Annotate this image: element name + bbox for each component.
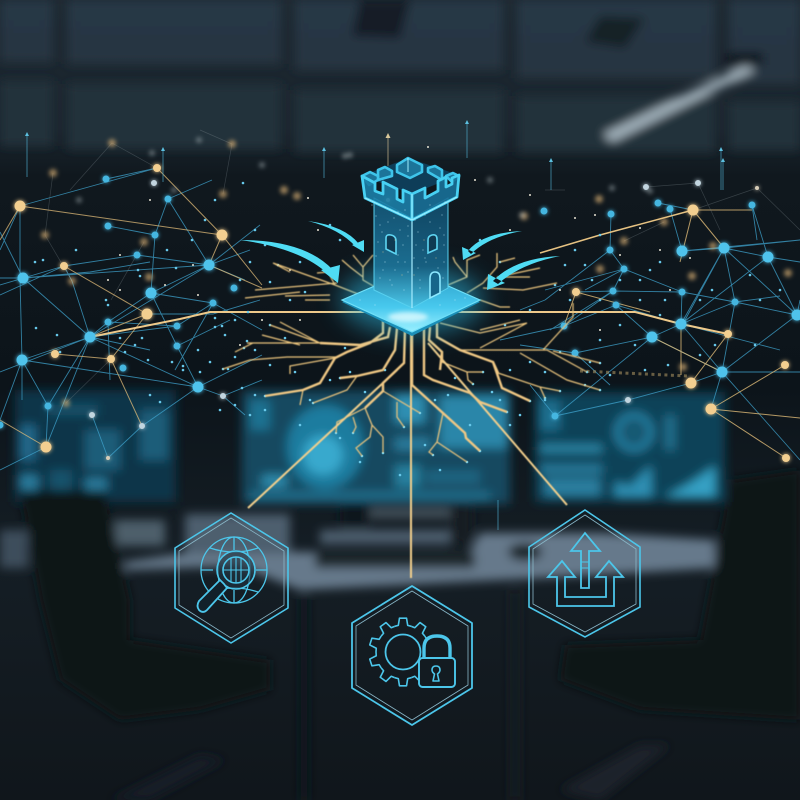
trunk roots (265, 320, 530, 451)
crown interior (362, 158, 459, 194)
tower glow (340, 266, 484, 334)
scattered data dots (35, 147, 780, 475)
arrow lower right (487, 256, 560, 290)
ceiling light (603, 66, 756, 142)
desk and keyboard (0, 502, 715, 590)
tower speckles (360, 202, 465, 305)
dotted trail (580, 371, 688, 376)
arrow upper right (462, 231, 522, 260)
long root lines (248, 330, 567, 578)
gold upper line (540, 210, 693, 253)
gold main line (90, 312, 415, 337)
network nodes (0, 168, 797, 458)
gold edges (564, 210, 800, 458)
faint dim edges (45, 130, 232, 403)
magnifier (198, 551, 255, 612)
gold edges (0, 168, 262, 447)
hex icon: upward arrows (529, 510, 640, 637)
cyan inbound arrows (240, 221, 560, 290)
golden roots (223, 253, 600, 578)
left network constellation (0, 130, 415, 470)
padlock (419, 636, 455, 687)
globe (201, 537, 267, 603)
lower cabinets and chairs (20, 470, 800, 800)
arrow upper left (308, 221, 364, 252)
blue edges (500, 203, 800, 460)
ceiling fixtures (352, 0, 763, 65)
faint dim edges (545, 183, 800, 241)
tower crown (362, 158, 459, 220)
tower on glowing platform (340, 158, 484, 336)
monitors (15, 390, 725, 504)
right network constellation (415, 183, 800, 460)
gear (368, 618, 438, 686)
tower windows and door (386, 235, 440, 298)
tower body (374, 198, 448, 308)
large blue nodes (22, 248, 797, 387)
three arrows (548, 533, 623, 606)
hex icon: global search (175, 513, 288, 643)
back merlons (362, 158, 459, 185)
dim bokeh nodes (45, 140, 788, 403)
medium blue nodes (0, 179, 752, 425)
crown front left face (362, 176, 412, 220)
thin root branches (223, 253, 600, 462)
platform (342, 270, 480, 336)
arrow lower left (240, 240, 340, 283)
gold nodes (20, 206, 711, 447)
pale nodes (92, 183, 698, 426)
blue edges (0, 168, 262, 470)
gold main line (415, 312, 728, 334)
window panes (0, 0, 800, 152)
crown front right face (412, 175, 459, 220)
upward data arrows (25, 120, 725, 530)
hex icon: settings lock (352, 586, 472, 725)
